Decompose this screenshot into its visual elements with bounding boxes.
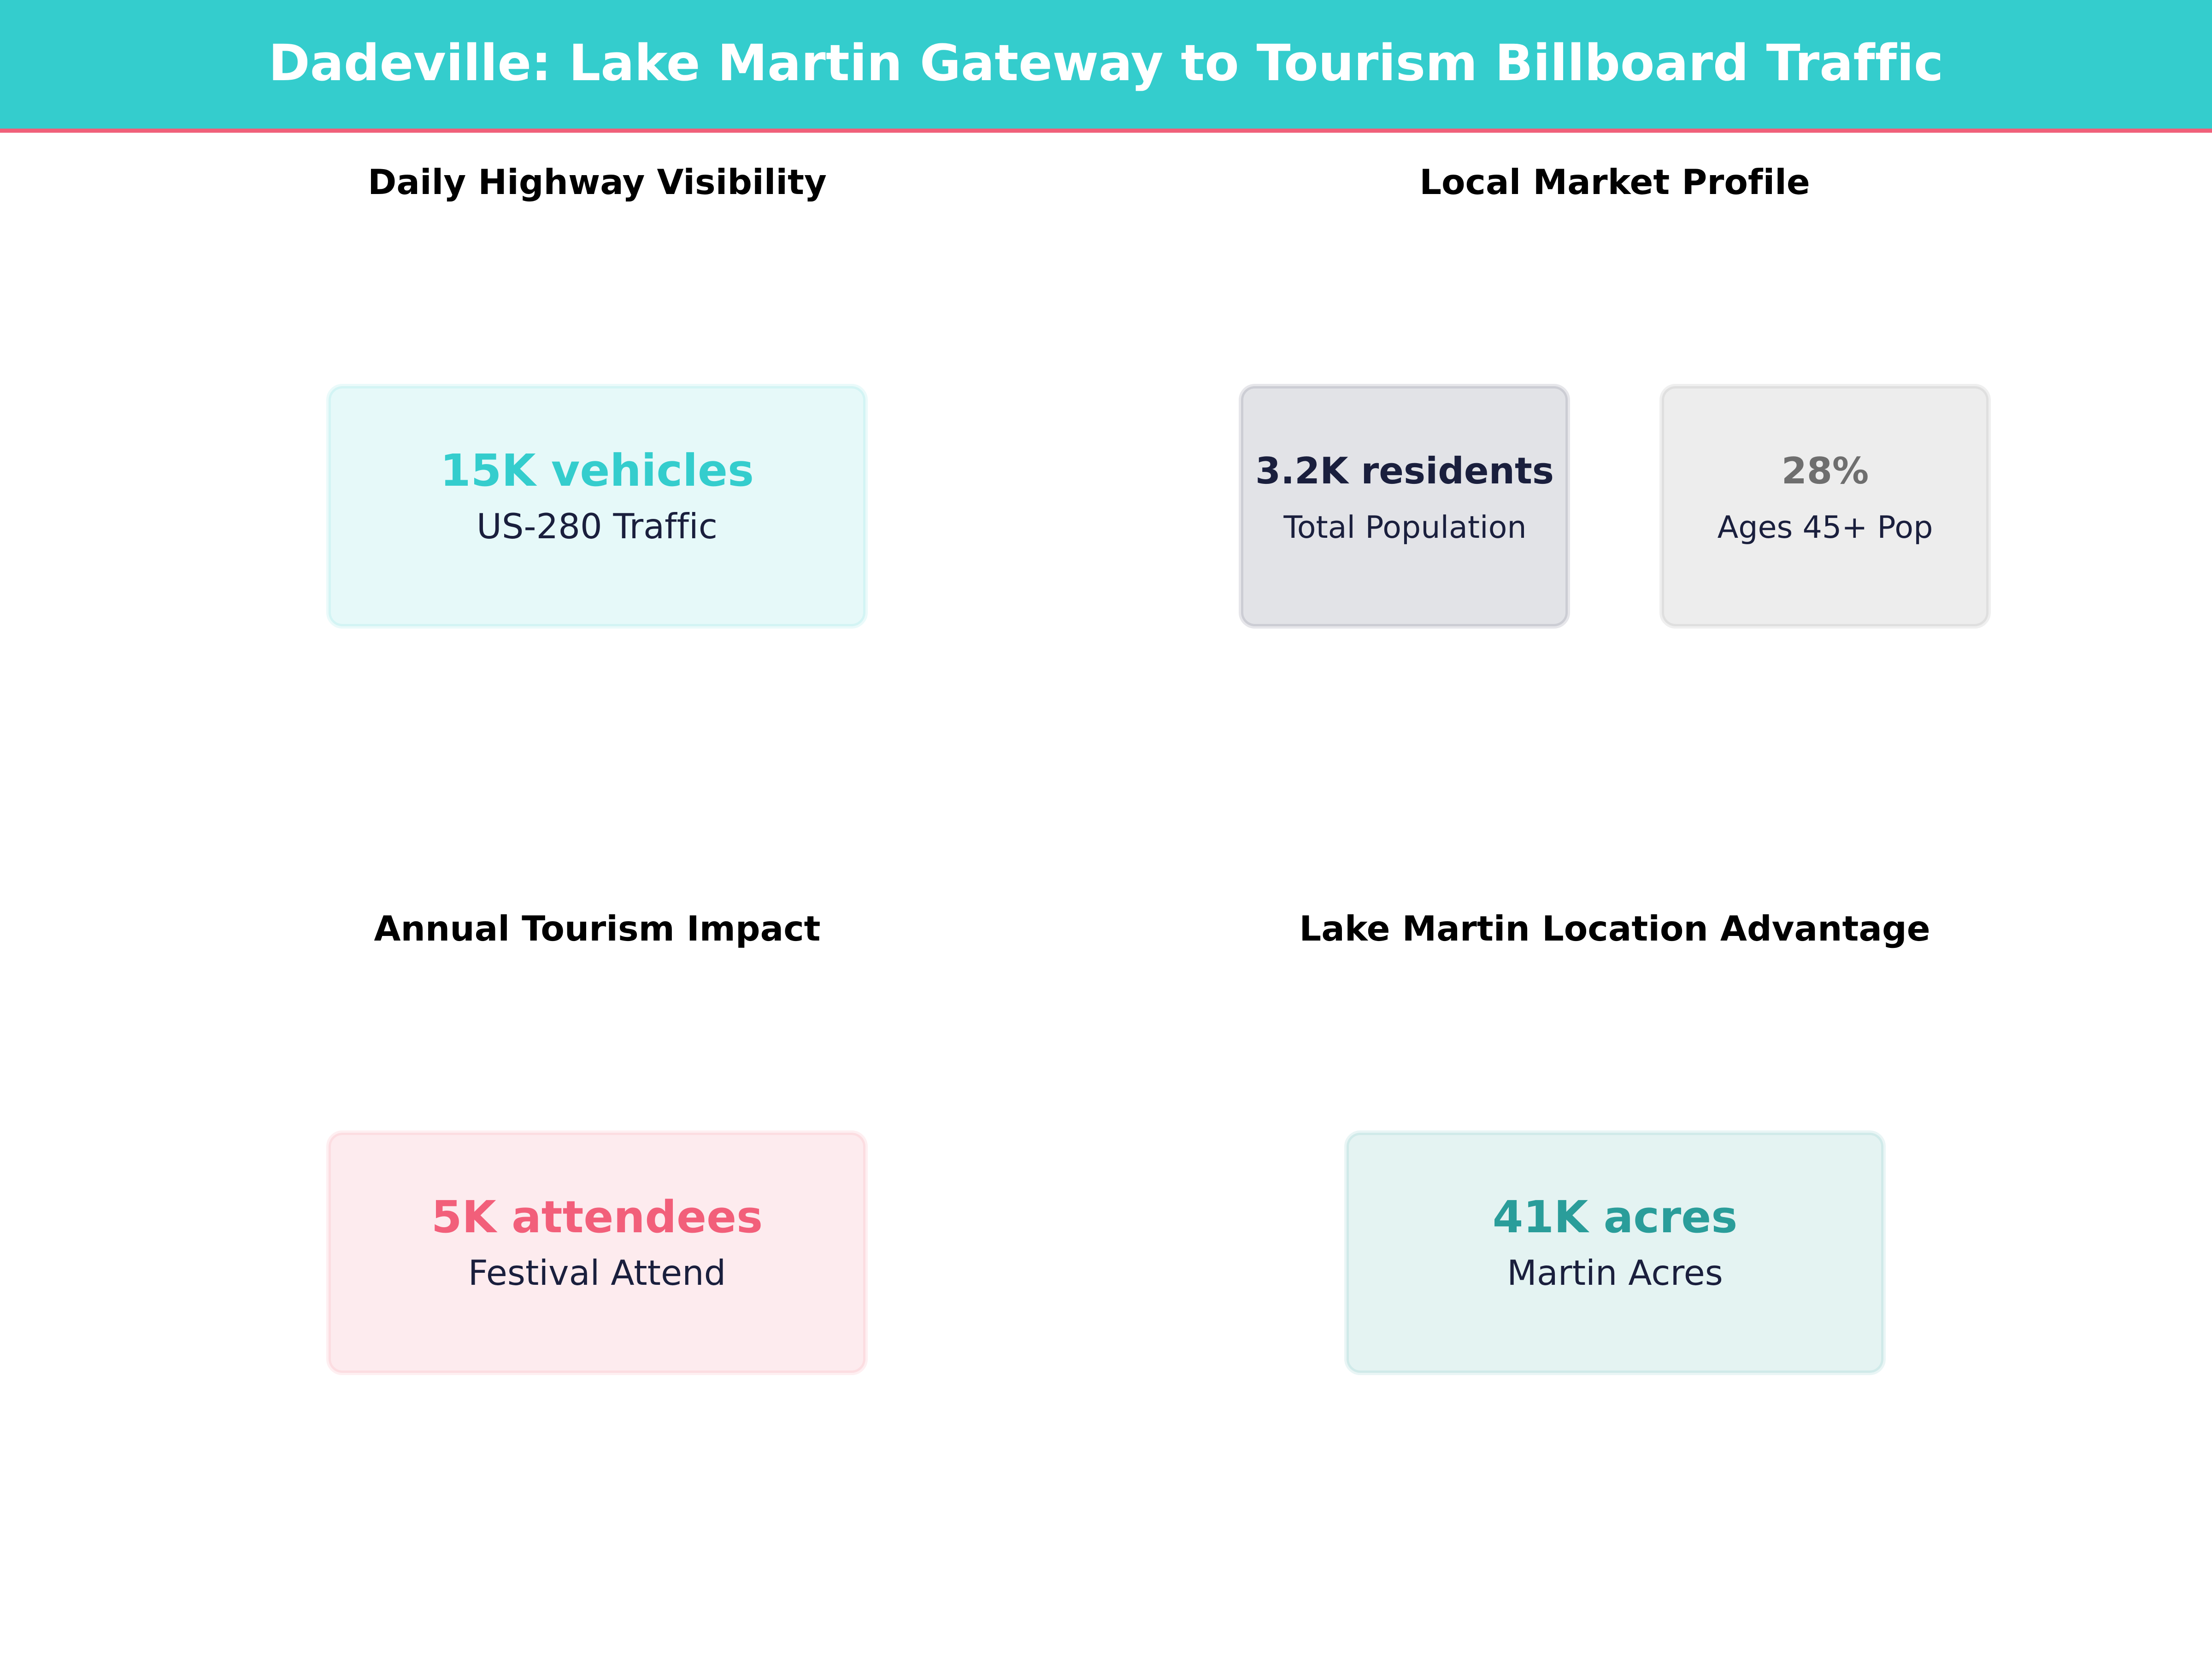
stat card: total population: 3.2K residents — [1255, 449, 1554, 492]
stat card: ages 45+: Ages 45+ Pop — [1718, 509, 1933, 545]
panel: local market profile — [1241, 162, 1988, 626]
stat card: martin acres — [1347, 1133, 1883, 1373]
title: Dadeville: Lake Martin Gateway to Tourism Billboard Traffic — [269, 34, 1943, 92]
stat card: festival attendance: 5K attendees — [431, 1191, 763, 1243]
panel: annual tourism impact — [329, 908, 865, 1373]
stat card: US-280 traffic: 15K vehicles — [440, 445, 754, 496]
heading: lake martin location advantage: Lake Martin Location Advantage — [1299, 908, 1930, 949]
stat card: total population — [1241, 386, 1568, 626]
stat card: US-280 traffic — [329, 386, 865, 626]
stat card: ages 45+ — [1662, 386, 1988, 626]
stat card: martin acres: Martin Acres — [1507, 1253, 1723, 1293]
heading: local market profile: Local Market Profile — [1419, 162, 1810, 202]
panel: daily highway visibility — [329, 162, 865, 626]
stat card: ages 45+: 28% — [1782, 449, 1869, 492]
stat card: US-280 traffic: US-280 Traffic — [477, 506, 718, 547]
stat card: festival attendance: Festival Attend — [468, 1253, 726, 1293]
header banner — [0, 0, 2212, 133]
stat card: festival attendance — [329, 1133, 865, 1373]
heading: daily highway visibility: Daily Highway Visibility — [368, 162, 827, 202]
heading: annual tourism impact: Annual Tourism Impact — [374, 908, 821, 949]
stat card: total population: Total Population — [1283, 509, 1527, 545]
panel: lake martin location advantage — [1299, 908, 1930, 1373]
stat card: martin acres: 41K acres — [1493, 1191, 1737, 1243]
